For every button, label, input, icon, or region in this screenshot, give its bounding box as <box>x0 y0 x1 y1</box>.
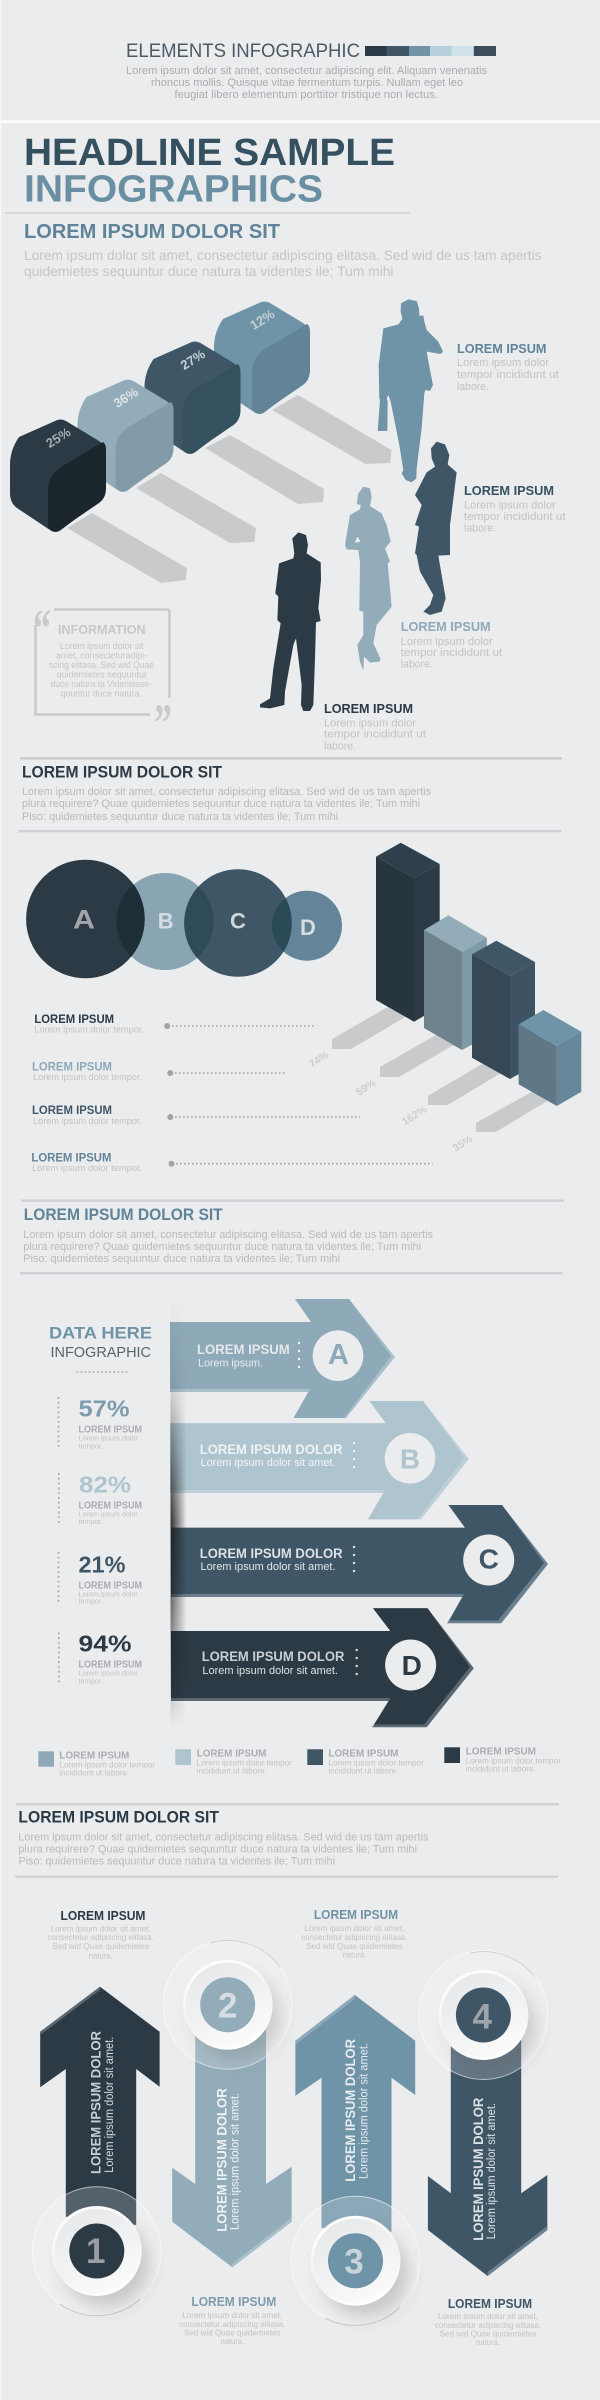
header intro text: rhoncus mollis. Quisque vitae fermentum turpis. Nullam eget leo <box>151 77 463 89</box>
stat 82%: tempor. <box>78 1517 103 1526</box>
isometric block: 36%: 36% <box>111 384 141 411</box>
caption 2: Sed wid Quae quidemietes <box>184 2327 281 2337</box>
arrow 2 vertical text: LOREM IPSUM DOLOR <box>214 2088 230 2232</box>
stat 57%: Lorem ipsum dolor <box>78 1434 138 1443</box>
down arrow 4 <box>428 2040 547 2276</box>
caption 1: Lorem ipsum dolor sit amet, <box>51 1924 151 1934</box>
data panel title <box>49 1323 152 1372</box>
list row 1: LOREM IPSUM <box>34 1012 114 1026</box>
stat 57%: 57% <box>78 1396 130 1422</box>
caption 2 <box>179 2294 286 2346</box>
caption 3: Lorem ipsum dolor sit amet, <box>304 1923 404 1933</box>
caption 2: LOREM IPSUM <box>191 2294 276 2309</box>
legend item C <box>307 1749 424 1776</box>
header intro text: feugiat libero elementum porttitor tristique non lectus. <box>174 89 438 101</box>
3D bar 3 <box>472 941 535 1079</box>
arrow D: D <box>402 1650 422 1681</box>
list row 4 <box>31 1151 433 1173</box>
digit 2: 2 <box>218 1986 237 2025</box>
arrow A: Lorem ipsum. <box>198 1358 263 1370</box>
arrow 3 vertical text: Lorem ipsum dolor sit amet. <box>358 2043 370 2179</box>
person caption 4: tempor incididunt ut <box>324 729 426 741</box>
digit 4: 4 <box>472 1997 492 2036</box>
list row 1: Lorem ipsum dolor tempor. <box>34 1025 144 1035</box>
opening quote mark: “ <box>33 598 51 658</box>
up arrow 3 <box>295 1995 415 2232</box>
information quote box <box>33 598 172 753</box>
arrow 1 vertical text <box>87 2031 116 2174</box>
person caption 1: LOREM IPSUM <box>457 341 546 356</box>
person caption 4: LOREM IPSUM <box>324 701 413 716</box>
circle letter C: C <box>230 908 246 934</box>
legend item B <box>175 1749 292 1776</box>
person caption 2: Lorem ipsum dolor <box>464 500 556 512</box>
main headline: HEADLINE SAMPLE <box>24 132 395 174</box>
stat 94% <box>59 1631 142 1686</box>
person caption 3: labore. <box>401 659 433 671</box>
down arrow 2 <box>172 2030 292 2267</box>
legend item B: Lorem ipsum dolor tempor <box>197 1759 292 1768</box>
person caption 1: labore. <box>457 381 489 393</box>
percent labels: 35% <box>451 1133 475 1155</box>
colour swatch strip <box>365 46 496 56</box>
main headline: INFOGRAPHICS <box>24 168 323 210</box>
legend item B: incididunt ut labore. <box>197 1767 267 1776</box>
legend item B: LOREM IPSUM <box>197 1749 266 1760</box>
arrow A: A <box>328 1339 349 1371</box>
digit 3: 3 <box>344 2242 364 2281</box>
list row 3: LOREM IPSUM <box>32 1103 112 1117</box>
arrow C: Lorem ipsum dolor sit amet. <box>200 1561 336 1573</box>
stat 21%: 21% <box>78 1552 126 1578</box>
legend item A: LOREM IPSUM <box>59 1751 129 1762</box>
arrow A <box>170 1299 395 1418</box>
arrow 4 vertical text: LOREM IPSUM DOLOR <box>470 2098 486 2241</box>
legend item D: Lorem ipsum dolor tempor <box>466 1757 561 1766</box>
stat 82% <box>59 1472 142 1526</box>
caption 2: natura. <box>220 2336 244 2346</box>
stat 21%: Lorem ipsum dolor <box>78 1590 138 1599</box>
legend item C: LOREM IPSUM <box>328 1749 398 1760</box>
intro paragraph <box>24 247 542 279</box>
section 3 paragraph: Piso: quidemietes sequuntur duce natura ta videntes ile; Tum mihi <box>23 1253 340 1265</box>
3D bar 2 <box>424 915 487 1050</box>
arrow 3 vertical text <box>342 2039 370 2182</box>
stat 94%: tempor. <box>78 1677 103 1686</box>
information body <box>49 641 154 699</box>
person caption 4: labore. <box>324 740 356 752</box>
arrow D: Lorem ipsum dolor sit amet. <box>202 1665 338 1677</box>
section 4 paragraph: Lorem ipsum dolor sit amet, consectetur adipiscing elitasa. Sed wid de us tam apertis <box>18 1832 429 1844</box>
arrow 3 vertical text: LOREM IPSUM DOLOR <box>342 2039 358 2182</box>
isometric block: 27% <box>144 342 240 454</box>
person caption 2: tempor incididunt ut <box>464 511 566 523</box>
legend item D: LOREM IPSUM <box>466 1747 536 1758</box>
arrow B <box>170 1401 469 1519</box>
isometric block: 27%: 27% <box>178 346 208 373</box>
person caption 4 <box>324 701 426 752</box>
caption 2: consectetur adipiscing elitasa. <box>179 2319 286 2329</box>
silhouette: woman in skirt <box>345 487 392 671</box>
section 2 paragraph: Lorem ipsum dolor sit amet, consectetur adipiscing elitasa. Sed wid de us tam apertis <box>22 786 431 798</box>
information heading: INFORMATION <box>58 622 146 637</box>
intro paragraph: Lorem ipsum dolor sit amet, consectetur adipiscing elitasa. Sed wid de us tam apertis <box>24 247 542 263</box>
caption 4: Sed wid Quae quidemietes <box>440 2329 536 2339</box>
isometric block: 25% <box>10 420 106 532</box>
plate 4 with ring <box>419 1950 548 2080</box>
isometric block: 12% <box>214 302 310 414</box>
section 4 paragraph: Piso: quidemietes sequuntur duce natura ta videntes ile; Tum mihi <box>18 1856 335 1868</box>
list row 3: Lorem ipsum dolor tempor. <box>33 1116 142 1126</box>
circle letter A: A <box>73 904 95 934</box>
section 4 paragraph: plura requirere? Quae quidemietes sequuntur duce natura ta videntes ile; Tum mihi <box>18 1844 417 1856</box>
data panel title: INFOGRAPHIC <box>50 1344 151 1361</box>
section 3 paragraph: plura requirere? Quae quidemietes sequuntur duce natura ta videntes ile; Tum mihi <box>23 1241 421 1253</box>
digit 1: 1 <box>86 2232 105 2271</box>
caption 3 <box>301 1907 408 1959</box>
legend item D: incididunt ut labore. <box>466 1765 536 1774</box>
person caption 3 <box>401 619 502 671</box>
overlapping circles A B C D <box>26 860 342 978</box>
intro paragraph: quidemietes sequuntur duce natura ta videntes ile; Tum mihi <box>24 263 394 279</box>
arrow C: C <box>479 1543 499 1574</box>
isometric block: 12%: 12% <box>247 306 278 333</box>
caption 3: natura. <box>343 1949 366 1959</box>
arrow A: LOREM IPSUM <box>197 1342 290 1357</box>
3D bar 4 <box>519 1010 581 1106</box>
arrow 4 vertical text: Lorem ipsum dolor sit amet. <box>486 2103 498 2239</box>
isometric block: 36% <box>78 380 174 492</box>
stat 94%: LOREM IPSUM <box>78 1660 142 1671</box>
data panel title: DATA HERE <box>49 1323 152 1342</box>
stat 94%: Lorem ipsum dolor <box>78 1669 138 1678</box>
percent labels: 162% <box>400 1103 430 1128</box>
header intro text <box>126 65 487 101</box>
caption 3: LOREM IPSUM <box>314 1907 398 1922</box>
information body: quuntur duce natura. <box>60 689 142 699</box>
percent labels: 74% <box>307 1049 332 1071</box>
plate 2 with ring <box>163 1940 292 2069</box>
arrow C <box>171 1505 548 1623</box>
plate 1 with ring <box>32 2187 161 2316</box>
stat 21% <box>58 1552 142 1606</box>
caption 4: natura. <box>476 2337 500 2347</box>
information body: amet, consecteturadipi- <box>56 650 147 660</box>
legend item C: incididunt ut labore. <box>328 1767 398 1776</box>
legend item D <box>444 1747 561 1774</box>
section 3 paragraph <box>23 1229 433 1265</box>
section 2 paragraph <box>22 786 431 823</box>
main headline <box>24 132 395 210</box>
caption 1: LOREM IPSUM <box>61 1908 145 1923</box>
stat 82%: 82% <box>79 1472 131 1498</box>
list row 3 <box>32 1103 360 1126</box>
arrow D: LOREM IPSUM DOLOR <box>202 1649 345 1664</box>
caption 1: consectetur adipiscing elitasa. <box>47 1932 154 1942</box>
list row 2 <box>32 1060 287 1082</box>
percent labels: 59% <box>354 1077 379 1099</box>
stat 21%: LOREM IPSUM <box>78 1581 142 1592</box>
caption 4: Lorem ipsum dolor sit amet, <box>438 2311 538 2321</box>
caption 1: Sed wid Quae quidemietes <box>52 1941 149 1951</box>
list row 4: LOREM IPSUM <box>31 1151 111 1165</box>
person caption 2 <box>464 483 566 535</box>
header title: ELEMENTS INFOGRAPHIC <box>126 41 360 62</box>
silhouette: woman arms crossed <box>415 442 457 615</box>
person caption 3: Lorem ipsum dolor <box>401 636 493 648</box>
stat 57% <box>58 1396 142 1451</box>
legend item C: Lorem ipsum dolor tempor <box>328 1759 424 1768</box>
person caption 2: labore. <box>464 523 496 535</box>
circle letter D: D <box>300 915 316 940</box>
silhouette: man in suit <box>260 532 321 711</box>
arrow 1 vertical text: LOREM IPSUM DOLOR <box>87 2031 103 2174</box>
person caption 2: LOREM IPSUM <box>464 483 554 498</box>
caption 4 <box>435 2296 541 2347</box>
person caption 1: Lorem ipsum dolor <box>457 357 549 369</box>
section 4 heading: LOREM IPSUM DOLOR SIT <box>18 1808 220 1827</box>
bar shadows <box>332 1007 549 1132</box>
arrow 2 vertical text <box>214 2088 241 2232</box>
legend item A <box>38 1751 155 1778</box>
caption 3: Sed wid Quae quidemietes <box>306 1941 403 1951</box>
section 4 paragraph <box>18 1832 429 1868</box>
up arrow 1 <box>40 1987 160 2225</box>
intro subheading: LOREM IPSUM DOLOR SIT <box>24 221 280 243</box>
person caption 3: tempor incididunt ut <box>401 647 502 659</box>
person caption 3: LOREM IPSUM <box>401 619 491 634</box>
list row 2: Lorem ipsum dolor tempor. <box>33 1072 142 1082</box>
legend item A: Lorem ipsum dolor tempor <box>59 1761 155 1770</box>
section 3 paragraph: Lorem ipsum dolor sit amet, consectetur adipiscing elitasa. Sed wid de us tam apertis <box>23 1229 433 1241</box>
information body: quidemietes sequuntur <box>57 670 147 680</box>
arrow 4 vertical text <box>470 2098 498 2241</box>
information body: duce natura ta Videntesse- <box>50 679 152 689</box>
caption 3: consectetur adipiscing elitasa. <box>301 1932 408 1942</box>
legend item A: incididunt ut labore. <box>59 1769 129 1778</box>
3D bar 1 <box>376 843 440 1022</box>
list row 4: Lorem ipsum dolor tempor. <box>32 1163 142 1173</box>
caption 1 <box>47 1908 154 1960</box>
stat 82%: LOREM IPSUM <box>78 1501 142 1512</box>
caption 4: consectetur adipiscing elitasa. <box>435 2320 541 2330</box>
arrow 2 vertical text: Lorem ipsum dolor sit amet. <box>229 2093 241 2230</box>
section 3 heading: LOREM IPSUM DOLOR SIT <box>24 1205 223 1224</box>
caption 2: Lorem ipsum dolor sit amet, <box>182 2310 282 2320</box>
circle letter B: B <box>158 908 174 934</box>
stat 94%: 94% <box>78 1631 132 1657</box>
plate 3 with ring <box>291 2196 420 2325</box>
silhouette: man on phone <box>378 299 443 482</box>
arrow C: LOREM IPSUM DOLOR <box>200 1546 343 1561</box>
stat 21%: tempor. <box>78 1596 103 1606</box>
stat 57%: LOREM IPSUM <box>78 1425 142 1436</box>
arrow D <box>171 1608 474 1727</box>
section 2 paragraph: Piso: quidemietes sequuntur duce natura ta videntes ile; Tum mihi <box>22 811 338 823</box>
section 2 paragraph: plura requirere? Quae quidemietes sequuntur duce natura ta videntes ile; Tum mihi <box>22 798 420 810</box>
list row 1 <box>34 1012 315 1035</box>
stat 82%: Lorem ipsum dolor <box>78 1510 138 1519</box>
arrow 1 vertical text: Lorem ipsum dolor sit amet. <box>104 2037 116 2173</box>
person caption 1: tempor incididunt ut <box>457 369 559 381</box>
header intro text: Lorem ipsum dolor sit amet, consectetur adipiscing elit. Aliquam venenatis <box>126 65 487 77</box>
person caption 4: Lorem ipsum dolor <box>324 718 416 730</box>
arrow B: B <box>400 1443 420 1474</box>
person caption 1 <box>457 341 559 393</box>
caption 1: natura. <box>89 1950 112 1960</box>
block shadows <box>67 395 392 583</box>
closing quote mark: ” <box>154 693 172 753</box>
caption 4: LOREM IPSUM <box>448 2296 532 2311</box>
isometric block: 25%: 25% <box>43 424 74 451</box>
percent labels <box>307 1049 475 1155</box>
information body: scing elitasa. Sed wid Quae <box>49 660 154 670</box>
arrow B: LOREM IPSUM DOLOR <box>200 1442 343 1457</box>
list row 2: LOREM IPSUM <box>32 1060 112 1074</box>
arrow B: Lorem ipsum dolor sit amet. <box>200 1457 336 1469</box>
section 2 heading: LOREM IPSUM DOLOR SIT <box>22 763 223 782</box>
stat 57%: tempor. <box>78 1442 103 1451</box>
information body: Lorem ipsum dolor sit <box>60 641 144 651</box>
